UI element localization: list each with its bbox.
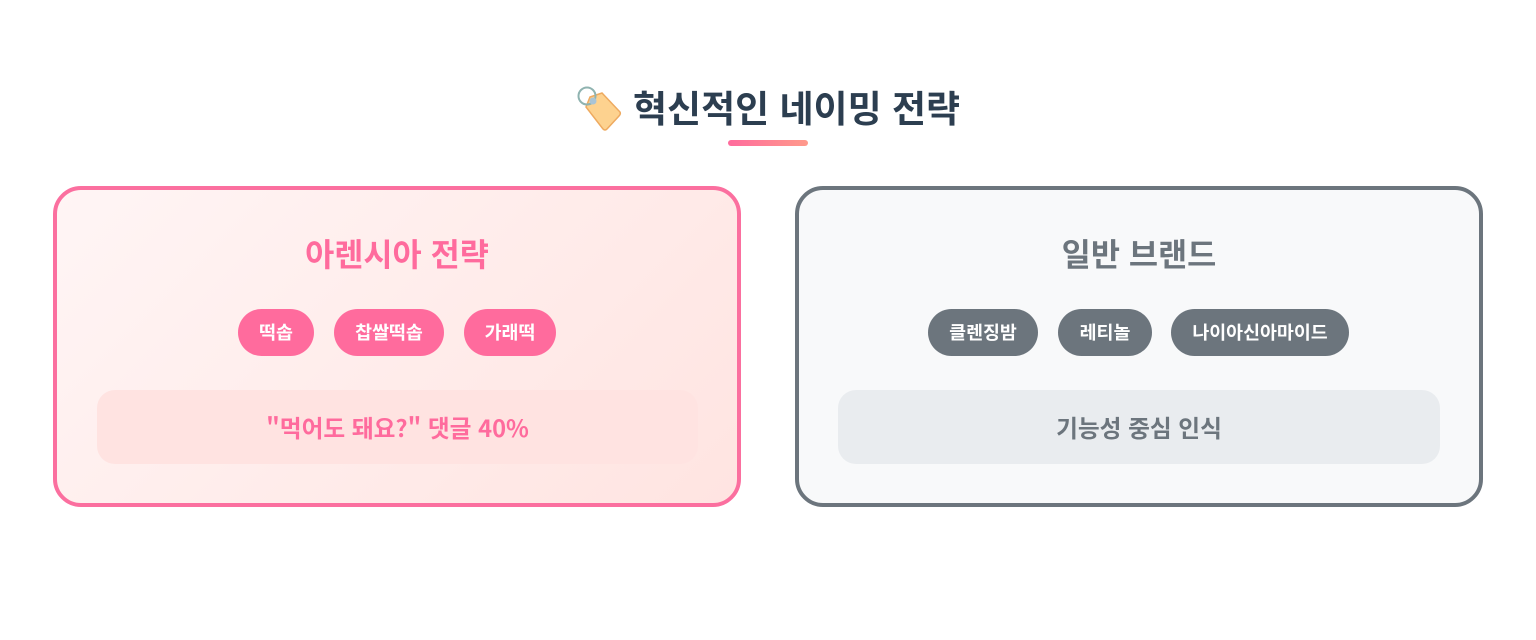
- panel heading: 아렌시아 전략: [305, 230, 489, 276]
- title underline: [728, 140, 808, 146]
- title: [578, 79, 960, 146]
- callout: "먹어도 돼요?" 댓글 40%: [266, 410, 529, 444]
- heading text: 혁신적인 네이밍 전략: [633, 79, 960, 133]
- tag: 찹쌀떡솝: [334, 309, 444, 356]
- panel background: [795, 186, 1483, 507]
- panel background: [53, 186, 741, 507]
- tag: 나이아신아마이드: 나이아신아마이드: [1192, 319, 1328, 345]
- tag: 레티놀: [1058, 309, 1152, 356]
- panel: Arencia strategy: [53, 186, 741, 507]
- tag: 나이아신아마이드: [1171, 309, 1349, 356]
- tag: 가래떡: 가래떡: [485, 319, 535, 345]
- callout: 기능성 중심 인식: [1056, 410, 1222, 444]
- panel: general brands: [795, 186, 1483, 507]
- tag: 클렌징밤: [928, 309, 1038, 356]
- tag: 찹쌀떡솝: 찹쌀떡솝: [355, 319, 423, 345]
- callout: [838, 390, 1440, 464]
- tag: 가래떡: [464, 309, 556, 356]
- callout: [97, 390, 698, 464]
- tag: 떡솝: 떡솝: [259, 319, 293, 345]
- tag: 레티놀: 레티놀: [1080, 319, 1130, 345]
- panel heading: 일반 브랜드: [1062, 230, 1216, 276]
- tag: 클렌징밤: 클렌징밤: [949, 319, 1017, 345]
- tag: 떡솝: [238, 309, 314, 356]
- icon: label tag: [578, 86, 622, 131]
